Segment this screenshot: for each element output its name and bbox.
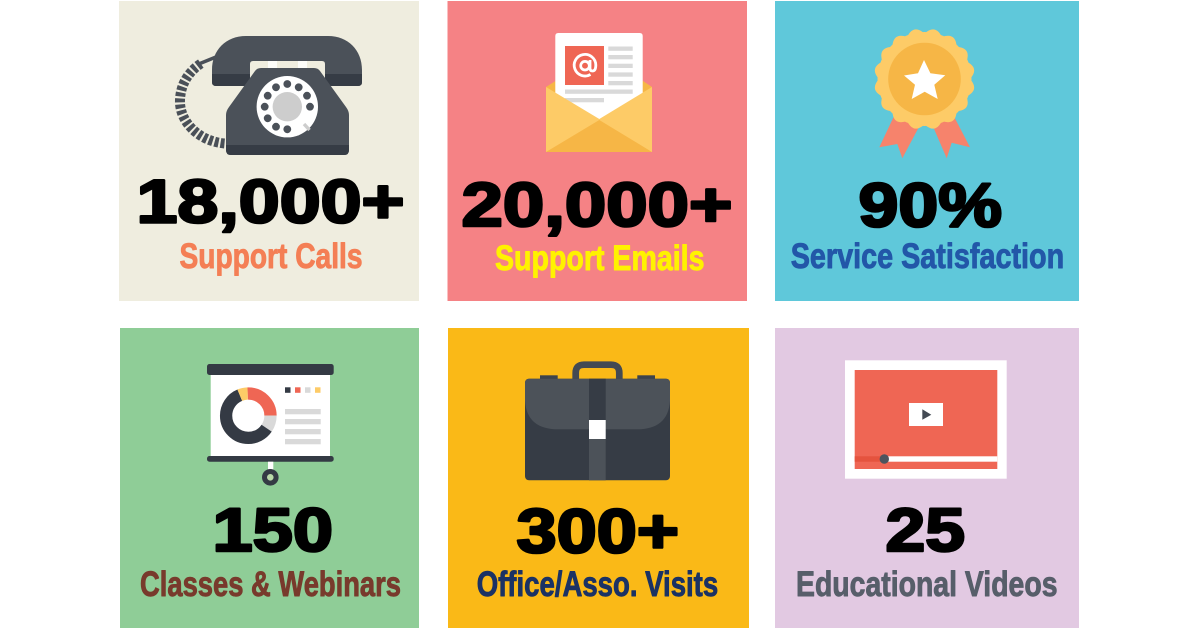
panel: support calls	[119, 1, 419, 301]
panel: office and association visits	[448, 328, 749, 628]
label: service satisfaction: Service Satisfaction	[791, 237, 1064, 276]
icon: presentation screen with donut chart	[207, 364, 334, 483]
panel background	[120, 328, 419, 628]
stat: 25: 25	[886, 496, 965, 565]
icon: video player	[845, 360, 1007, 479]
panel: educational videos	[775, 328, 1079, 628]
label: support calls: Support Calls	[180, 237, 362, 276]
icon: briefcase	[525, 365, 670, 480]
panel: classes and webinars	[120, 328, 419, 628]
stat: 300+: 300+	[516, 498, 679, 566]
stat: 20,000+: 20,000+	[462, 171, 732, 240]
panel background	[775, 1, 1079, 301]
label: educational videos: Educational Videos	[796, 565, 1058, 604]
panel: service satisfaction	[775, 1, 1079, 301]
label: support emails: Support Emails	[495, 239, 704, 278]
label: office and association visits: Office/Asso. Visits	[477, 565, 718, 604]
panel background	[448, 1, 747, 301]
stat: 150: 150	[212, 496, 333, 565]
label: classes and webinars: Classes & Webinars	[140, 565, 401, 604]
icon: envelope with letter	[546, 33, 652, 152]
icon: rotary telephone	[180, 36, 362, 155]
panel background	[775, 328, 1079, 628]
panel background	[119, 1, 419, 301]
stat: 90%: 90%	[858, 172, 1002, 240]
panel: support emails	[448, 1, 747, 301]
stat: 18,000+: 18,000+	[136, 168, 404, 236]
icon: award rosette with star	[875, 29, 974, 158]
panel background	[448, 328, 749, 628]
